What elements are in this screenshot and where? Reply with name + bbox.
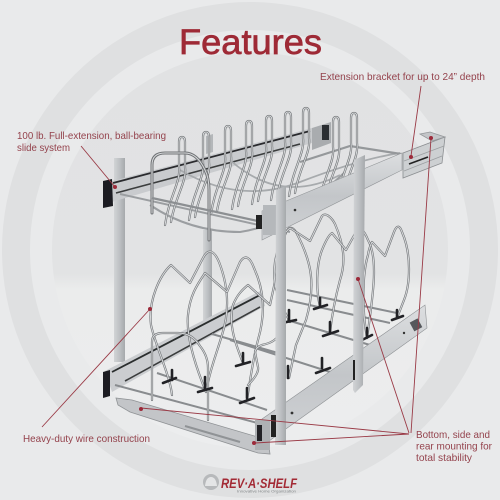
pull-out rack product illustration: [103, 108, 445, 454]
callout: wire construction: Heavy-duty wire construction: [23, 433, 150, 445]
logo: [203, 474, 297, 494]
black wire feet: [163, 298, 403, 403]
lower rack wave wires: [151, 215, 409, 420]
upper rear slide rail: [103, 122, 331, 208]
callout: slide system: slide system: [17, 142, 70, 154]
front slide rail, upper: [256, 153, 402, 240]
upper rack front arch: [152, 153, 262, 240]
logo: REV·A·SHELF: [221, 475, 297, 491]
extension bracket: [403, 132, 445, 178]
callout: mounting: [139, 136, 492, 464]
callout: mounting: Bottom, side and: [416, 429, 490, 441]
callout: slide system: [17, 130, 166, 189]
callout: mounting: total stability: [416, 452, 473, 464]
front uprights: [255, 155, 365, 450]
upper rack curved base rods: [120, 146, 401, 232]
callout: extension bracket: [320, 71, 485, 159]
callout: wire construction: [23, 307, 152, 445]
callout: extension bracket: Extension bracket for up to 24” depth: [320, 71, 485, 83]
front slide rail, lower: [262, 305, 427, 446]
upper rack hairpin wires: [165, 108, 357, 225]
callout: mounting: rear mounting for: [416, 440, 492, 452]
logo: Innovative Home Organization: [237, 488, 296, 494]
callout: slide system: 100 lb. Full-extension, ball-bearing: [17, 130, 166, 142]
lower rear slide rail: [103, 290, 265, 398]
rear uprights: [114, 134, 213, 362]
title: Features: [179, 23, 322, 62]
lower rack tray and rods: [115, 290, 397, 454]
